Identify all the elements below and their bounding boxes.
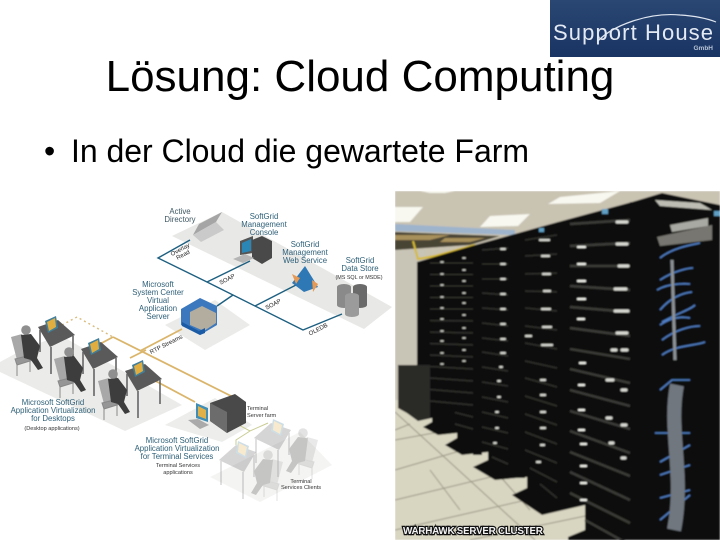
labels: System Center server — [132, 280, 184, 321]
label: OLEDB: OLEDB — [308, 323, 329, 337]
floor plate: application server — [165, 300, 250, 350]
labels: Management Console — [241, 212, 288, 237]
labels: System Center server: Virtual — [147, 296, 169, 305]
lower left rack tone — [398, 365, 430, 421]
labels: System Center server: Server — [147, 312, 170, 321]
labels: Terminal Services Clients: Terminal — [290, 479, 312, 485]
labels: Management Web Service: SoftGrid — [291, 240, 319, 249]
labels: Data Store: SoftGrid — [346, 256, 374, 265]
ceiling — [395, 191, 720, 261]
blue network cables — [655, 243, 705, 520]
floor plate: terminal clients — [210, 432, 332, 502]
labels: SoftGrid for Terminal Services: applications — [163, 470, 193, 476]
title: Lösung: Cloud Computing — [106, 52, 614, 101]
floor plate: terminal farm — [165, 398, 252, 442]
labels: Management Web Service: Management — [282, 248, 329, 257]
icon: terminal client 2 — [219, 441, 283, 501]
labels: Data Store — [335, 256, 383, 281]
icon: laptop — [193, 212, 224, 242]
labels: SoftGrid for Terminal Services: Application Virtualization — [135, 444, 219, 453]
icon: web service — [292, 266, 318, 292]
rack blue status lights — [539, 209, 720, 232]
labels: Management Web Service: Web Service — [283, 256, 327, 265]
labels: Active Directory — [164, 207, 196, 224]
logo: Support House: GmbH — [694, 45, 713, 52]
floor tile seams — [395, 412, 590, 540]
labels: System Center server: Microsoft — [142, 280, 175, 289]
rack white highlights — [441, 222, 628, 500]
label: SOAP web service: SOAP — [265, 299, 282, 312]
bundled cables lower — [674, 385, 678, 530]
icon: terminal client 1 — [254, 419, 318, 479]
labels: Overlay Read — [170, 243, 194, 263]
labels: SoftGrid for Terminal Services: Microsoft SoftGrid — [146, 436, 208, 445]
caption: WARHAWK SERVER CLUSTER: WARHAWK SERVER CLUSTER — [403, 526, 544, 537]
label: SOAP: SOAP — [219, 274, 236, 287]
labels: Management Console: SoftGrid — [250, 212, 278, 221]
dotted stream line — [62, 317, 113, 337]
patch panel top — [655, 200, 712, 246]
terminal client lines — [233, 422, 268, 445]
diagram: SoftGrid architecture — [0, 207, 392, 502]
labels: Active Directory: Active — [169, 207, 191, 216]
labels: System Center server: Application — [139, 304, 177, 313]
floor plate: desktops — [0, 335, 182, 431]
server racks silhouette — [398, 193, 720, 540]
photo: server cluster — [395, 191, 720, 540]
icon: management console — [233, 236, 272, 264]
labels: Terminal Server farm — [247, 406, 277, 419]
labels: Overlay Read: Overlay — [170, 243, 191, 258]
ceiling lights — [395, 191, 620, 227]
blue light strip and cable tray — [395, 224, 515, 259]
labels: Terminal Server farm: Terminal — [247, 406, 268, 412]
labels: SoftGrid for Desktops: Application Virtualization — [11, 406, 95, 415]
labels: Active Directory: Directory — [164, 215, 196, 224]
icon: desktop user 1 — [11, 316, 75, 376]
labels: Terminal Server farm: Server farm — [247, 413, 277, 419]
left wall — [395, 250, 425, 410]
grey cable bundle — [672, 260, 675, 360]
network lines: streaming — [100, 329, 243, 402]
labels: SoftGrid for Desktops: for Desktops — [31, 414, 75, 423]
labels: Data Store: Data Store — [341, 264, 379, 273]
icon: desktop user 3 — [98, 360, 162, 420]
labels: SoftGrid for Desktops: Microsoft SoftGrid — [22, 398, 84, 407]
rack columns dark edges — [473, 202, 720, 540]
labels: System Center server: System Center — [132, 288, 184, 297]
bullet text: In der Cloud die gewartete Farm — [71, 133, 529, 169]
labels: Management Web Service — [282, 240, 329, 265]
icon: terminal server farm — [188, 394, 246, 433]
network lines: management — [158, 240, 342, 330]
labels: SoftGrid for Terminal Services: for Terminal Services — [141, 452, 213, 461]
labels: Terminal Services Clients — [281, 479, 321, 491]
logo: Support House — [550, 0, 720, 57]
bullet text: • — [44, 133, 55, 169]
logo: Support House: Support House — [553, 20, 713, 45]
labels: Management Console: Management — [241, 220, 288, 229]
icon: data store cylinders — [337, 284, 367, 317]
labels: SoftGrid for Terminal Services: Terminal Services — [156, 463, 200, 469]
icon: application server — [181, 298, 217, 335]
labels: Terminal Services Clients: Services Clients — [281, 485, 321, 491]
rack shelves — [430, 220, 630, 540]
labels: SoftGrid for Desktops: (Desktop applications) — [24, 426, 80, 432]
icon: desktop user 2 — [54, 338, 118, 398]
label: RTP Streams: RTP Streams — [149, 334, 184, 356]
labels: Data Store: (MS SQL or MSDE) — [335, 275, 383, 281]
labels: Management Console: Console — [250, 228, 278, 237]
floor plate: management tier — [172, 212, 392, 329]
labels: SoftGrid for Terminal Services — [135, 436, 219, 476]
labels: SoftGrid for Desktops — [11, 398, 95, 432]
labels: Overlay Read: Read — [176, 250, 191, 262]
raised floor — [395, 400, 595, 540]
